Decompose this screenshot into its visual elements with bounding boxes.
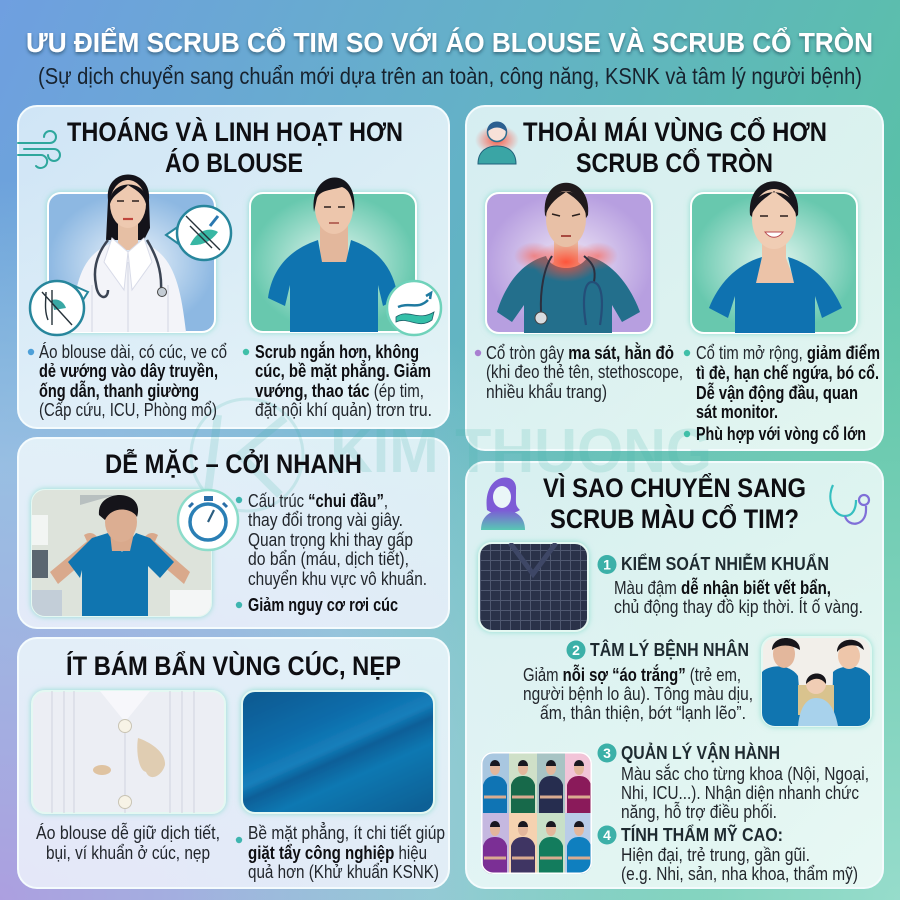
- image: colour coded uniforms grid: [481, 752, 592, 874]
- text block: dễ mặc bullets: thay đổi trong vài giây.: [248, 510, 403, 530]
- heading: thoải mái: [523, 115, 827, 178]
- icon: nurse silhouette: [481, 477, 525, 530]
- icon: stopwatch: [178, 490, 238, 550]
- watermark: KIM THUONG: [330, 417, 712, 486]
- text block: v neck bullets: Cổ tim mở rộng, giảm điểm: [696, 343, 880, 363]
- text block: fabric bullet: giặt tẩy công nghiệp hiệu: [248, 843, 427, 863]
- image: staff with child patient: [762, 637, 871, 726]
- item 1: kiểm soát nhiễm khuẩn: Màu đậm dễ nhận biết vết bẩn,: [614, 577, 831, 598]
- item 2: tâm lý bệnh nhân: [523, 639, 753, 723]
- text block: round neck bullets: Cổ tròn gây ma sát, hằn đỏ: [486, 342, 674, 363]
- icon: no snag bubble: [30, 281, 88, 335]
- heading: thoáng: ÁO BLOUSE: [165, 147, 303, 178]
- heading: dễ mặc: DỄ MẶC – CỞI NHANH: [105, 447, 362, 479]
- heading: vì sao: [543, 472, 806, 534]
- icon: smooth motion: [387, 281, 441, 335]
- heading: thoải mái: SCRUB CỔ TRÒN: [576, 147, 773, 178]
- text block: blouse bullets: (Cấp cứu, ICU, Phòng mổ): [39, 400, 217, 420]
- item 1: kiểm soát nhiễm khuẩn: KIỂM SOÁT NHIỄM KHUẨN: [621, 553, 829, 574]
- item 3: quản lý vận hành: QUẢN LÝ VẬN HÀNH: [621, 742, 780, 763]
- panel: thoáng và linh hoạt: [18, 106, 449, 428]
- image: stained blouse: [32, 691, 225, 813]
- item 4: tính thẩm mỹ cao: [598, 824, 858, 884]
- panel: vì sao chuyển sang: [466, 462, 883, 888]
- text block: dễ mặc bullets: chuyển khu vực vô khuẩn.: [248, 569, 427, 589]
- item 1: kiểm soát nhiễm khuẩn: chủ động thay đồ kịp thời. Ít ố vàng.: [614, 597, 863, 617]
- item 2: tâm lý bệnh nhân: 2: [572, 642, 580, 658]
- text block: scrub bullets: vướng, thao tác (ép tim,: [255, 381, 424, 401]
- heading: thoáng: THOÁNG VÀ LINH HOẠT HƠN: [67, 116, 403, 147]
- item 4: tính thẩm mỹ cao: (e.g. Nhi, sản, nha khoa, thẩm mỹ): [621, 864, 858, 884]
- text block: fabric bullet: [236, 822, 445, 882]
- panel: ít bám bẩn: [18, 638, 449, 888]
- item 3: quản lý vận hành: Nhi, ICU...). Nhận diện nhanh chức: [621, 783, 859, 803]
- image: man in scrub: [250, 177, 416, 332]
- text block: blouse bullets: dẻ vướng vào dây truyền,: [39, 361, 218, 381]
- heading: vì sao: SCRUB MÀU CỔ TIM?: [550, 503, 799, 534]
- item 1: kiểm soát nhiễm khuẩn: 1: [603, 556, 611, 572]
- text block: scrub bullets: đặt nội khí quản) trơn tru.: [255, 400, 432, 420]
- panel: thoải mái vùng cổ: [466, 106, 883, 450]
- icon: no tangle bubble: [166, 206, 231, 260]
- image: doctor in blouse: [48, 174, 215, 332]
- image: irritated neck: [486, 183, 652, 333]
- item 3: quản lý vận hành: năng, hỗ trợ điều phối.: [621, 801, 777, 822]
- image: flat blue fabric: [242, 691, 434, 813]
- text block: blouse caption: bụi, ví khuẩn ở cúc, nẹp: [46, 843, 210, 863]
- text block: blouse bullets: ống dẫn, thanh giường: [39, 380, 199, 401]
- item 2: tâm lý bệnh nhân: người bệnh lo âu). Tông màu dịu,: [523, 684, 753, 704]
- item 1: kiểm soát nhiễm khuẩn: [598, 553, 863, 617]
- watermark: [191, 399, 712, 511]
- item 4: tính thẩm mỹ cao: 4: [603, 827, 611, 843]
- text block: dễ mặc bullets: Giảm nguy cơ rơi cúc: [248, 595, 398, 615]
- text block: v neck bullets: [684, 343, 880, 444]
- text block: round neck bullets: nhiều khẩu trang): [486, 382, 607, 402]
- text block: dễ mặc bullets: [236, 491, 427, 615]
- heading: vì sao: VÌ SAO CHUYỂN SANG: [543, 472, 806, 503]
- image: dark checked v-neck: [479, 543, 588, 631]
- heading: ít bám bẩn: ÍT BÁM BẨN VÙNG CÚC, NẸP: [66, 650, 401, 681]
- text block: v neck bullets: sát monitor.: [696, 402, 778, 422]
- heading: thoáng: [67, 116, 403, 178]
- image: v neck comfort: [691, 181, 857, 333]
- item 2: tâm lý bệnh nhân: TÂM LÝ BỆNH NHÂN: [590, 639, 749, 660]
- heading: thoải mái: THOẢI MÁI VÙNG CỔ HƠN: [523, 115, 827, 147]
- item 3: quản lý vận hành: 3: [603, 745, 611, 761]
- image: man changing scrub: [32, 490, 211, 616]
- icon: doctor with neck irritation: [475, 122, 519, 164]
- text block: round neck bullets: (khi đeo thẻ tên, stethoscope,: [486, 362, 683, 382]
- text block: dễ mặc bullets: Quan trọng khi thay gấp: [248, 530, 413, 550]
- text block: blouse caption: [36, 822, 220, 863]
- text block: blouse caption: Áo blouse dễ giữ dịch tiết,: [36, 822, 220, 843]
- item 4: tính thẩm mỹ cao: TÍNH THẨM MỸ CAO:: [621, 824, 783, 845]
- item 3: quản lý vận hành: [598, 742, 869, 822]
- text block: scrub bullets: Scrub ngắn hơn, không: [255, 341, 419, 362]
- text block: dễ mặc bullets: do bẩn (máu, dịch tiết),: [248, 549, 409, 569]
- text block: blouse bullets: Áo blouse dài, có cúc, ve cổ: [39, 342, 227, 362]
- text block: round neck bullets: [475, 342, 683, 402]
- item 2: tâm lý bệnh nhân: Giảm nỗi sợ “áo trắng” (trẻ em,: [523, 664, 741, 685]
- icon: stethoscope: [830, 485, 869, 524]
- text block: scrub bullets: cúc, bề mặt phẳng. Giảm: [255, 360, 431, 381]
- item 2: tâm lý bệnh nhân: ấm, thân thiện, bớt “lạnh lẽo”.: [540, 703, 746, 723]
- text block: scrub bullets: [243, 341, 432, 420]
- text block: dễ mặc bullets: Cấu trúc “chui đầu”,: [248, 491, 388, 511]
- text block: fabric bullet: Bề mặt phẳng, ít chi tiết giúp: [248, 822, 445, 843]
- panel: dễ mặc cởi nhanh: [18, 438, 449, 628]
- text block: fabric bullet: quả hơn (Khử khuẩn KSNK): [248, 862, 439, 882]
- text block: blouse bullets: [28, 342, 227, 420]
- icon: wind: [18, 131, 60, 168]
- text block: v neck bullets: Dễ vận động đầu, quan: [696, 382, 858, 403]
- item 4: tính thẩm mỹ cao: Hiện đại, trẻ trung, gần gũi.: [621, 845, 810, 865]
